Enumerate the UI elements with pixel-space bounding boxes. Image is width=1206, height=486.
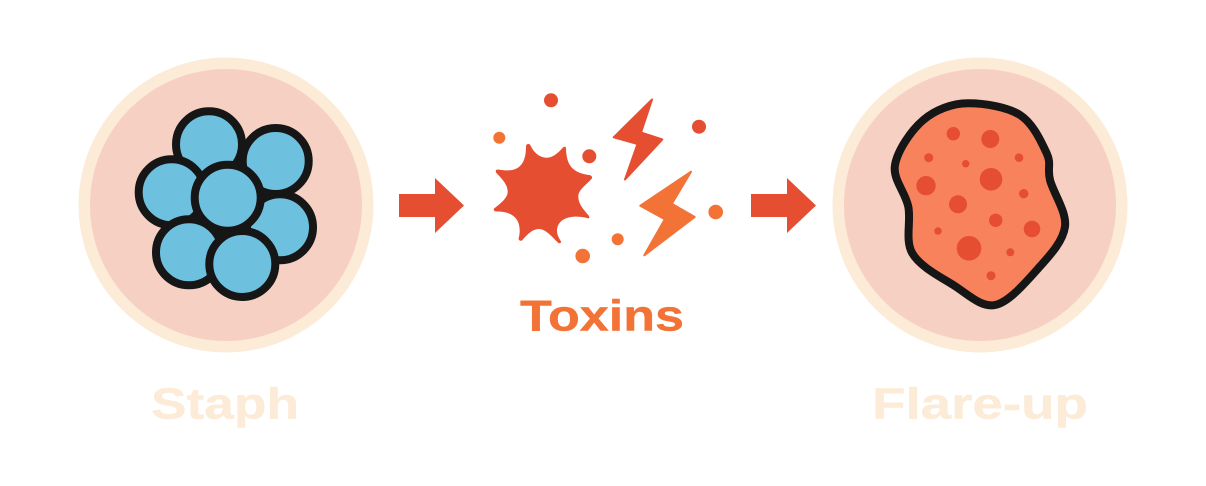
icon: toxin burst xyxy=(494,144,592,243)
arrow: staph to toxins xyxy=(399,178,464,233)
heading: Toxins: Toxins xyxy=(520,292,684,340)
icon: red lightning bolt xyxy=(614,100,662,180)
arrow: toxins to flare-up xyxy=(751,178,816,233)
panel: staph circle xyxy=(78,58,374,352)
icon: staph cluster xyxy=(139,111,313,297)
lesion spots xyxy=(916,127,1040,280)
icon: skin lesion xyxy=(895,103,1065,305)
heading: Staph: Staph xyxy=(151,380,299,428)
heading: Flare-up: Flare-up xyxy=(872,380,1088,428)
toxin particles xyxy=(493,93,723,263)
panel: flare-up circle xyxy=(832,58,1128,352)
icon: orange lightning bolt xyxy=(640,172,695,255)
